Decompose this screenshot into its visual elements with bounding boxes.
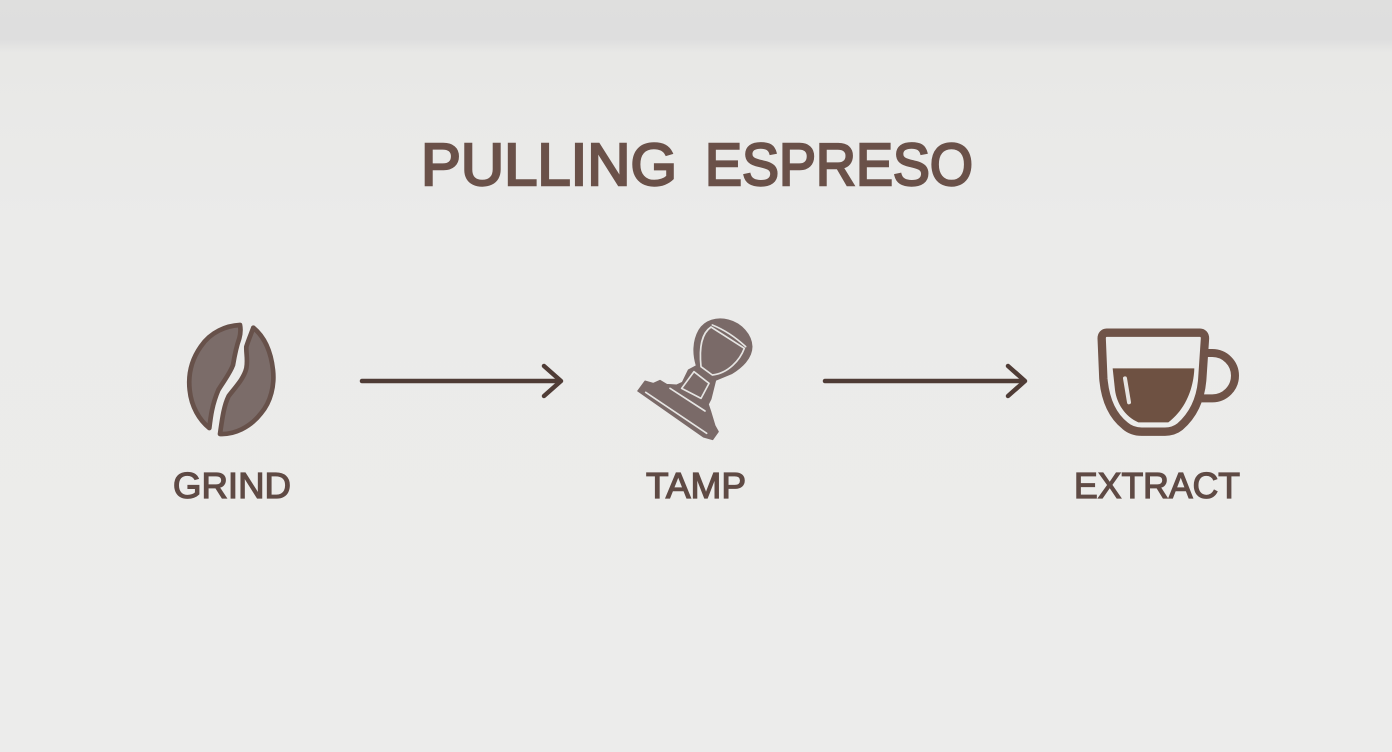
step 3: extract bbox=[1074, 333, 1240, 506]
step 1: grind bbox=[173, 325, 291, 506]
label: tamp: TAMP bbox=[646, 465, 746, 506]
label: grind: GRIND bbox=[173, 465, 291, 506]
icon: coffee tamper bbox=[638, 319, 752, 440]
title: ESPRESO bbox=[705, 132, 973, 198]
icon: espresso cup bbox=[1102, 333, 1235, 432]
title bbox=[421, 132, 973, 198]
label: extract: EXTRACT bbox=[1074, 465, 1240, 506]
arrow: tamp to extract bbox=[825, 366, 1025, 396]
arrow: grind to tamp bbox=[362, 366, 561, 396]
icon: coffee bean bbox=[189, 325, 273, 434]
step 2: tamp bbox=[638, 319, 752, 506]
title: PULLING bbox=[421, 132, 677, 198]
